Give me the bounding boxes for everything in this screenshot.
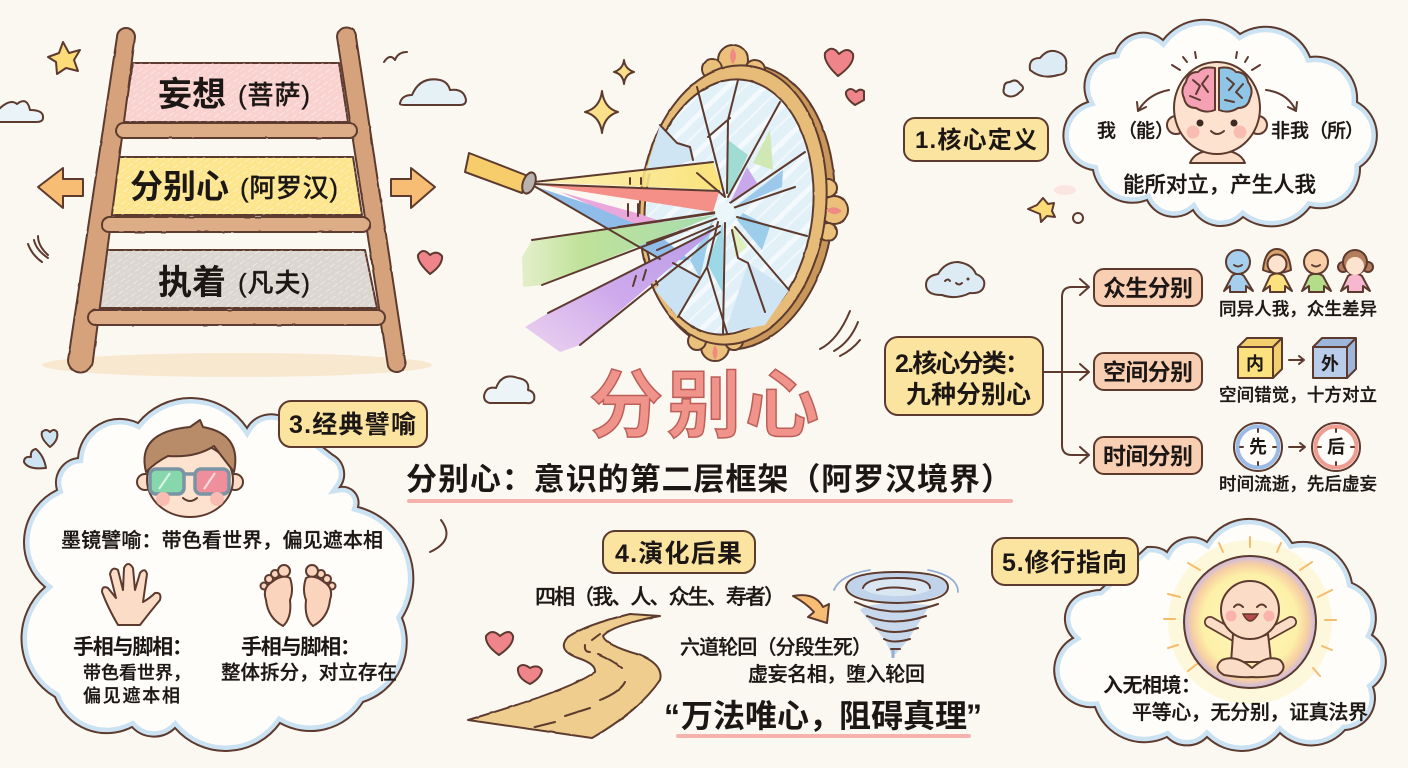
icon: big sparkle: [585, 91, 618, 133]
icon: heart large: [825, 49, 853, 76]
heading badge 3: 3.经典譬喻: [289, 411, 416, 439]
icon: curved orange arrow: [793, 595, 829, 623]
heading badge 2: 2.核心分类：: [895, 350, 1030, 378]
cracks: [618, 80, 807, 333]
label: non-self: 所: [1327, 120, 1346, 142]
icon: small sparkle: [614, 60, 634, 84]
icon: heart small: [518, 665, 542, 684]
person yellow: [1263, 249, 1292, 292]
label: non-self: ）: [1345, 120, 1364, 142]
heading badge 4: [603, 531, 755, 573]
icon: right cloud: [400, 79, 466, 105]
four marks text: 四相（我、人、众生、寿者）: [535, 586, 785, 609]
icon: outside cube: [1313, 338, 1356, 378]
category: space: [1094, 353, 1202, 390]
category: time: 时间分别: [1103, 443, 1193, 469]
cloud: practice: [1054, 519, 1386, 751]
arrow to self: [1137, 90, 1169, 111]
ground shadow: [42, 353, 432, 377]
left caption: 手相与脚相：: [73, 636, 193, 659]
label: non-self: 我: [1290, 120, 1309, 142]
arrow inside to outside: [1289, 356, 1304, 364]
arrow left: [38, 168, 83, 208]
flashlight tube: [465, 153, 538, 195]
text: formless state: [1103, 673, 1368, 724]
level: delusion 妄想 (bodhisattva): (菩萨): [238, 80, 310, 110]
person pink: [1338, 250, 1373, 292]
category: beings: 众生分别: [1103, 275, 1193, 301]
quote: “: [664, 698, 680, 734]
label: self: 能: [1136, 120, 1155, 142]
arrow before to after: [1289, 443, 1305, 451]
icon: heart small: [846, 89, 864, 105]
heading badge 5: 5.修行指向: [1002, 549, 1127, 577]
caption space: 空间错觉，十方对立: [1219, 385, 1377, 405]
category: beings: [1094, 269, 1202, 306]
metaphor: sunglasses: 墨镜譬喻：带色看世界，偏见遮本相: [61, 529, 383, 552]
section 1: core definition: [904, 20, 1377, 226]
cloud: definition: [1063, 20, 1377, 226]
right caption: 手相与脚相：: [241, 636, 361, 659]
icon: clock after: [1312, 423, 1360, 471]
icon: hand: [102, 564, 160, 625]
icon: outside cube: 外: [1321, 354, 1339, 374]
icon: boy with tinted glasses: [137, 420, 243, 517]
quote: 万法唯心，: [681, 698, 841, 734]
quote: ”: [966, 698, 982, 734]
icon: winding road: [468, 614, 661, 738]
caption beings: 同异人我，众生差异: [1219, 299, 1377, 319]
motion lines: [28, 236, 48, 262]
decorations around ladder: [0, 42, 466, 274]
icon: blue hearts: [24, 430, 57, 468]
icon: left foot: [260, 565, 292, 626]
level: delusion 妄想 (bodhisattva): [123, 63, 348, 122]
six realms text: 六道轮回（分段生死）: [680, 636, 872, 659]
mirror illustration: [465, 45, 864, 361]
heading badge 5: [992, 538, 1138, 585]
icon: head with two-colour brain: [1167, 52, 1267, 163]
level: attachment 执着 (ordinary): (凡夫): [238, 268, 310, 298]
heading badge 1: [904, 118, 1048, 161]
label: self: 我: [1097, 120, 1116, 142]
heading badge 3: [279, 401, 427, 447]
subtitle: 分别心：意识的第二层框架（阿罗汉境界）: [406, 462, 1012, 497]
ladder frame: [68, 28, 406, 372]
section 2: classification: [885, 249, 1377, 494]
level: attachment 执着 (ordinary): [98, 250, 377, 308]
underline: [407, 499, 1013, 503]
arrow to non-self: [1266, 90, 1297, 111]
icon: clock before: [1234, 423, 1282, 471]
icon: heart: [486, 632, 513, 655]
icon: right foot: [304, 565, 336, 626]
icon: thought clouds: [1030, 51, 1066, 77]
icon: inside cube: [1238, 338, 1282, 378]
mirror frame: [626, 45, 848, 361]
false names text: 虚妄名相，堕入轮回: [748, 663, 925, 686]
pale pink smudge: [1054, 185, 1076, 195]
right caption: 整体拆分，对立存在: [221, 662, 397, 684]
icon: clock after: 后: [1327, 437, 1345, 457]
ladder panel: [38, 28, 435, 377]
main title: 分别心: [589, 364, 819, 447]
section 3: classic metaphors: [22, 398, 446, 751]
icon: heart: [418, 251, 442, 274]
crescent mark: [430, 520, 446, 552]
icon: smiling cloud: [926, 262, 984, 297]
label: self: ）: [1155, 120, 1174, 142]
icon: small cloud under mirror: [484, 376, 534, 403]
glass shards: [645, 125, 789, 333]
caption time: 时间流逝，先后虚妄: [1219, 474, 1377, 494]
category: space: 空间分别: [1103, 359, 1193, 385]
icon: tornado: [834, 570, 958, 658]
person blue: [1224, 250, 1253, 292]
left caption: [73, 636, 193, 706]
level: discrimination 分别心 (arhat): [110, 157, 362, 215]
impact glow: [715, 202, 735, 222]
caption: 能所对立，产生人我: [1123, 173, 1316, 197]
icon: clock before: 先: [1249, 437, 1267, 457]
heading badge 4: 4.演化后果: [615, 540, 742, 568]
light beams: [522, 162, 723, 352]
text: formless state: 平等心，无分别，证真法界: [1132, 701, 1368, 724]
icon: small thought cloud: [1004, 80, 1023, 96]
right caption: [221, 636, 397, 684]
left caption: 带色看世界，: [83, 663, 191, 683]
icon: star: [1028, 198, 1055, 222]
quote: [664, 698, 982, 738]
icon: four people: [1224, 249, 1373, 292]
section 4: consequences: [468, 531, 982, 738]
label: non-self: 非: [1271, 120, 1290, 142]
person green: [1302, 250, 1331, 292]
icon: dot: [1073, 213, 1083, 223]
icon: inside cube: 内: [1246, 354, 1264, 374]
arrow right: [391, 168, 435, 208]
text: formless state: 入无相境：: [1103, 673, 1201, 697]
left caption: 偏见遮本相: [83, 686, 180, 706]
cloud: metaphors: [22, 398, 413, 751]
quote: 阻碍真理: [839, 698, 967, 734]
underline: [676, 734, 971, 738]
level: attachment 执着 (ordinary): 执着: [158, 264, 226, 302]
icon: meditating figure in halo: [1164, 537, 1336, 704]
category: time: [1094, 437, 1202, 474]
heading badge 2: [885, 337, 1043, 415]
label: non-self: （: [1309, 120, 1328, 142]
motion lines: [820, 311, 860, 356]
level: discrimination 分别心 (arhat): 分别心: [130, 168, 229, 205]
icon: bird: [384, 52, 407, 62]
section 5: practice direction: [992, 519, 1386, 751]
heading badge 2: 九种分别心: [906, 381, 1031, 409]
heading badge 1: 1.核心定义: [915, 127, 1037, 154]
level: discrimination 分别心 (arhat): (阿罗汉): [240, 173, 338, 203]
icon: star: [48, 42, 80, 74]
level: delusion 妄想 (bodhisattva): 妄想: [158, 76, 226, 114]
label: self: （: [1118, 120, 1137, 142]
connector arrows: [1043, 279, 1089, 463]
icon: left cloud: [0, 101, 43, 122]
